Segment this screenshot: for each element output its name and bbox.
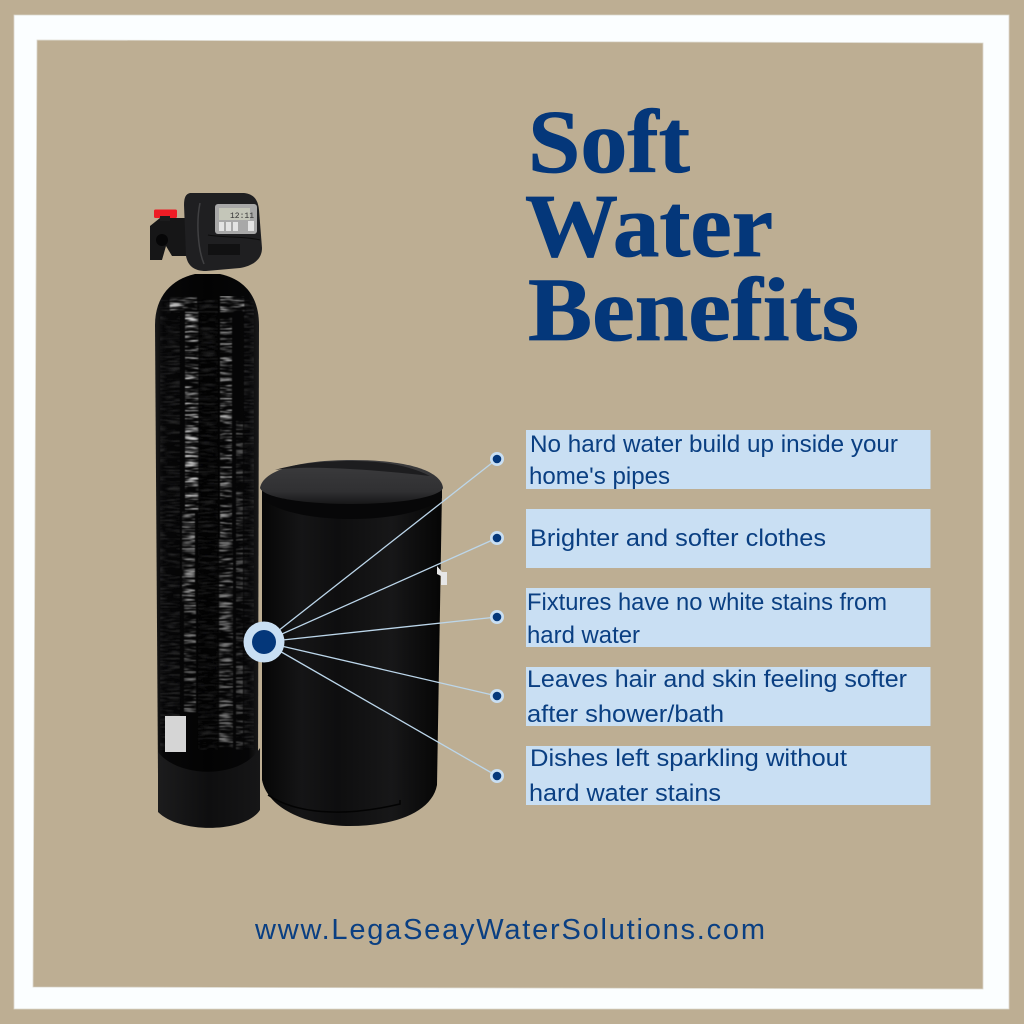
title: Benefits [528,261,859,360]
brine tank lid [260,460,443,504]
benefit 5 text: hard water stains [529,780,721,807]
title: Water [525,177,773,276]
control head [184,193,262,271]
benefit 5 text: Dishes left sparkling without [530,745,847,772]
faucet [437,566,447,585]
title [525,93,859,360]
benefit 3 text: hard water [527,622,640,649]
connector end dots [490,452,504,783]
brine tank [260,460,447,826]
benefit 3 text [527,589,887,649]
benefit 3 text: Fixtures have no white stains from [527,589,887,616]
benefit 1 text: No hard water build up inside your [530,431,898,458]
benefit 5 text [529,745,847,807]
bypass valve [150,218,186,260]
hub marker [244,622,284,662]
benefit 1 text: home's pipes [529,463,670,490]
water softener product photo [150,193,447,828]
benefit 2 text: Brighter and softer clothes [530,525,826,552]
title: Soft [528,93,690,192]
red handle [154,210,177,218]
benefit 4 text [527,666,907,728]
benefit 4 text: Leaves hair and skin feeling softer [527,666,907,693]
connector lines [264,459,497,776]
website url: www.LegaSeayWaterSolutions.com [254,914,765,946]
resin tank [155,274,260,828]
control valve: 12:11 [230,212,254,221]
tank label [165,716,186,752]
control valve [150,193,262,271]
benefit 4 text: after shower/bath [527,701,724,728]
benefit boxes [526,430,930,805]
display panel [215,204,257,234]
benefit 1 text [529,431,898,490]
tank base [158,748,260,828]
